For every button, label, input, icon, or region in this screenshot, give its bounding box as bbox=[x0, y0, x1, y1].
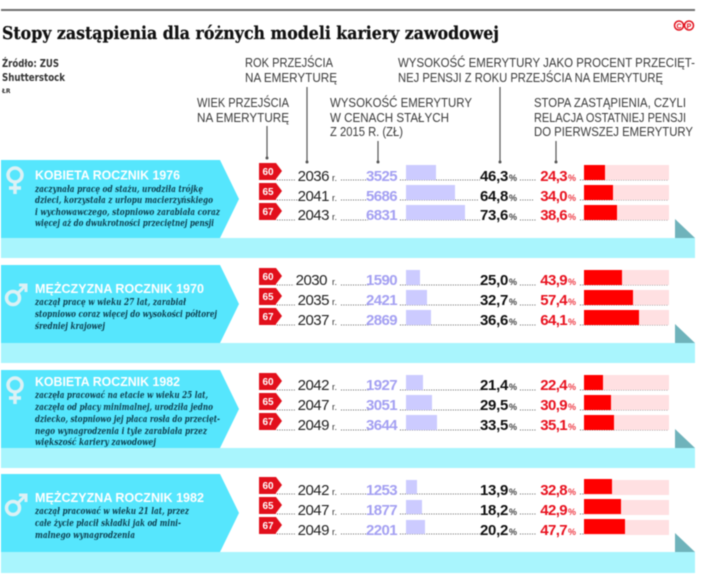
panel: woman 1976: dzieci, korzystała z urlopu macierzyńskiego bbox=[35, 195, 214, 206]
column header: retirement year bbox=[245, 55, 337, 164]
panel: man 1970 bbox=[1, 265, 239, 343]
row: age 67: 3644 bbox=[366, 417, 398, 434]
row: age 67: r. bbox=[332, 212, 337, 222]
row: age 67: 2869 bbox=[366, 312, 397, 329]
column header: retirement age: NA EMERYTURĘ bbox=[197, 110, 289, 125]
row: age 60: 1590 bbox=[366, 272, 397, 289]
row: age 60: r. bbox=[332, 487, 337, 497]
row: age 60: r. bbox=[332, 277, 337, 287]
row: age 60: % bbox=[509, 487, 517, 497]
row: age 60: 25,0 bbox=[480, 272, 508, 289]
row: age 65: % bbox=[568, 193, 576, 203]
row: age 65: 30,9 bbox=[540, 397, 567, 414]
row: age 60: 2030 bbox=[296, 272, 327, 289]
row: age 60: 13,9 bbox=[480, 482, 508, 499]
logo: copyright marks bbox=[674, 21, 694, 30]
row: age 60: 46,3 bbox=[480, 168, 508, 185]
panel: man 1970: zaczął pracę w wieku 27 lat, zarabiał bbox=[34, 297, 186, 308]
column header: pension as percent of average wage: NEJ PENSJI Z ROKU PRZEJŚCIA NA EMERYTURĘ bbox=[398, 70, 663, 85]
row: age 67: 67 bbox=[262, 417, 274, 428]
column header: retirement age bbox=[197, 95, 289, 160]
row: age 67 bbox=[259, 517, 669, 539]
column header: pension amount bbox=[330, 95, 472, 164]
row: age 67: 36,6 bbox=[480, 312, 508, 329]
panel: woman 1982: zaczęła pracować na etacie w wieku 25 lat, bbox=[34, 390, 208, 401]
row: age 67: 38,6 bbox=[540, 207, 567, 224]
column header: replacement rate bbox=[534, 95, 693, 164]
column header: pension amount: WYSOKOŚĆ EMERYTURY bbox=[330, 95, 472, 110]
row: age 60: r. bbox=[332, 173, 337, 183]
panel: woman 1982: dziecko, stopniowo jej płaca rosła do przecięt- bbox=[35, 414, 220, 425]
title: Stopy zastąpienia dla różnych modeli kariery zawodowej bbox=[2, 23, 499, 44]
row: age 65: 2047 bbox=[298, 502, 329, 519]
row: age 65: 2041 bbox=[298, 188, 329, 205]
row: age 65: 65 bbox=[262, 501, 274, 512]
row: age 65: % bbox=[568, 402, 576, 412]
row: age 65: r. bbox=[332, 297, 337, 307]
row: age 65: 2047 bbox=[298, 397, 329, 414]
row: age 67: 33,5 bbox=[480, 417, 508, 434]
row: age 67: 67 bbox=[262, 521, 274, 532]
panel: woman 1976: KOBIETA ROCZNIK 1976 bbox=[35, 168, 180, 182]
row: age 60: r. bbox=[332, 382, 337, 392]
source note: Źródło: ZUS bbox=[2, 57, 59, 70]
row: age 65 bbox=[259, 183, 669, 205]
row: age 60: % bbox=[568, 382, 576, 392]
row: age 67: 2049 bbox=[298, 522, 329, 539]
column header: pension amount: Z 2015 R. (ZŁ) bbox=[330, 124, 403, 139]
row: age 65: 1877 bbox=[366, 502, 397, 519]
row: age 65: 32,7 bbox=[480, 292, 508, 309]
row: age 65: 18,2 bbox=[480, 502, 508, 519]
row: age 60: 1927 bbox=[366, 377, 397, 394]
row: age 67: 64,1 bbox=[540, 312, 567, 329]
row: age 67: 67 bbox=[262, 312, 274, 323]
section: woman born 1976 bbox=[1, 160, 695, 258]
row: age 60: 1253 bbox=[366, 482, 397, 499]
row: age 60: 21,4 bbox=[480, 377, 509, 394]
panel: woman 1976: więcej aż do dwukrotności przeciętnej pensji bbox=[35, 218, 214, 229]
row: age 67: % bbox=[509, 422, 517, 432]
row: age 60: 60 bbox=[262, 481, 274, 492]
panel: man 1982: całe życie płacił składki jak od mini- bbox=[35, 518, 181, 529]
row: age 67: % bbox=[509, 527, 517, 537]
column header: retirement age: WIEK PRZEJŚCIA bbox=[197, 95, 289, 110]
panel: woman 1982: nego wynagrodzenia i tyle zarabiała przez bbox=[35, 426, 207, 437]
row: age 65: % bbox=[509, 297, 517, 307]
row: age 65: 65 bbox=[262, 292, 274, 303]
panel: man 1970: stopniowo coraz więcej do wysokości półtorej bbox=[35, 309, 217, 320]
row: age 67: % bbox=[568, 527, 576, 537]
source note: Shutterstock bbox=[2, 71, 66, 84]
row: age 67: % bbox=[568, 422, 576, 432]
row: age 67: r. bbox=[332, 317, 337, 327]
row: age 65: r. bbox=[332, 402, 337, 412]
row: age 67: 35,1 bbox=[540, 417, 567, 434]
panel: man 1982: zaczął pracować w wieku 21 lat, przez bbox=[34, 506, 189, 517]
source note bbox=[1, 57, 66, 95]
row: age 60: % bbox=[568, 277, 576, 287]
row: age 65: 42,9 bbox=[540, 502, 567, 519]
row: age 67: 20,2 bbox=[480, 522, 508, 539]
row: age 67: 2043 bbox=[298, 207, 329, 224]
column header: retirement year: ROK PRZEJŚCIA bbox=[245, 55, 333, 70]
row: age 67: r. bbox=[332, 527, 337, 537]
section: man born 1982 bbox=[1, 474, 695, 573]
row: age 65: % bbox=[509, 402, 517, 412]
row: age 67: % bbox=[509, 317, 517, 327]
row: age 65 bbox=[259, 393, 669, 414]
row: age 65: % bbox=[509, 193, 517, 203]
row: age 65: r. bbox=[332, 193, 337, 203]
row: age 67: 2037 bbox=[298, 312, 329, 329]
row: age 60 bbox=[259, 373, 669, 394]
row: age 65: % bbox=[568, 507, 576, 517]
row: age 60 bbox=[259, 268, 669, 289]
panel: man 1970: średniej krajowej bbox=[35, 321, 105, 332]
row: age 67: 47,7 bbox=[540, 522, 567, 539]
row: age 60: % bbox=[509, 382, 517, 392]
row: age 60 bbox=[259, 163, 669, 185]
logo: copyright marks: C bbox=[676, 24, 682, 30]
row: age 65: % bbox=[509, 507, 517, 517]
panel: woman 1976: i wychowawczego, stopniowo zarabiała coraz bbox=[35, 207, 220, 218]
row: age 60: 3525 bbox=[366, 168, 397, 185]
row: age 60: 60 bbox=[262, 272, 274, 283]
row: age 67: % bbox=[568, 317, 576, 327]
row: age 65: r. bbox=[332, 507, 337, 517]
panel: woman 1982: zaczęła od płacy minimalnej, urodziła jedno bbox=[34, 402, 214, 413]
row: age 65: 29,5 bbox=[480, 397, 508, 414]
row: age 65: 34,0 bbox=[540, 188, 567, 205]
row: age 60: 22,4 bbox=[540, 377, 568, 394]
row: age 67: 73,6 bbox=[480, 207, 508, 224]
column header: retirement year: NA EMERYTURĘ bbox=[245, 70, 337, 85]
row: age 65: 65 bbox=[262, 187, 274, 198]
row: age 67: 2049 bbox=[298, 417, 329, 434]
section: man born 1970 bbox=[1, 265, 695, 363]
row: age 65 bbox=[259, 497, 669, 519]
section: woman born 1982 bbox=[1, 370, 695, 468]
row: age 60 bbox=[259, 477, 669, 499]
panel: woman 1982 bbox=[1, 370, 239, 448]
row: age 60: 2036 bbox=[298, 168, 329, 185]
row: age 60: 2042 bbox=[298, 482, 329, 499]
row: age 60: % bbox=[509, 277, 517, 287]
row: age 65: 5686 bbox=[366, 188, 397, 205]
panel: woman 1976: zaczynała pracę od stażu, urodziła trójkę bbox=[34, 184, 203, 195]
row: age 67: 67 bbox=[262, 207, 274, 218]
row: age 60: 60 bbox=[262, 377, 274, 388]
column header: pension as percent of average wage bbox=[398, 55, 695, 164]
row: age 65: 64,8 bbox=[480, 188, 508, 205]
column header: pension amount: W CENACH STAŁYCH bbox=[330, 110, 449, 125]
row: age 65: 2421 bbox=[366, 292, 397, 309]
row: age 67 bbox=[259, 413, 669, 434]
panel: woman 1976 bbox=[1, 160, 239, 238]
row: age 65: 65 bbox=[262, 397, 274, 408]
row: age 60: % bbox=[509, 173, 517, 183]
row: age 67: % bbox=[568, 212, 576, 222]
panel: man 1982: MĘŻCZYZNA ROCZNIK 1982 bbox=[35, 490, 204, 505]
row: age 60: 43,9 bbox=[540, 272, 567, 289]
row: age 65: 2035 bbox=[298, 292, 329, 309]
source note: ŁR bbox=[1, 88, 11, 95]
row: age 60: 60 bbox=[262, 167, 274, 178]
panel: woman 1982: większość kariery zawodowej bbox=[35, 437, 156, 448]
row: age 60: 32,8 bbox=[540, 482, 567, 499]
row: age 65 bbox=[259, 288, 669, 309]
row: age 67: 6831 bbox=[366, 207, 397, 224]
row: age 67: r. bbox=[332, 422, 337, 432]
row: age 65: 3051 bbox=[366, 397, 397, 414]
row: age 67: 2201 bbox=[366, 522, 397, 539]
row: age 67 bbox=[259, 308, 669, 329]
row: age 67 bbox=[259, 203, 669, 224]
row: age 60: % bbox=[568, 487, 576, 497]
panel: man 1982: malnego wynagrodzenia bbox=[35, 530, 135, 541]
row: age 67: % bbox=[509, 212, 517, 222]
row: age 60: 2042 bbox=[298, 377, 329, 394]
panel: woman 1982: KOBIETA ROCZNIK 1982 bbox=[35, 374, 180, 389]
row: age 65: 57,4 bbox=[540, 292, 568, 309]
panel: man 1970: MĘŻCZYZNA ROCZNIK 1970 bbox=[35, 281, 204, 296]
row: age 60: % bbox=[568, 173, 576, 183]
logo: copyright marks: P bbox=[687, 24, 692, 30]
panel: man 1982 bbox=[1, 474, 239, 552]
row: age 65: % bbox=[568, 297, 576, 307]
row: age 60: 24,3 bbox=[540, 168, 567, 185]
